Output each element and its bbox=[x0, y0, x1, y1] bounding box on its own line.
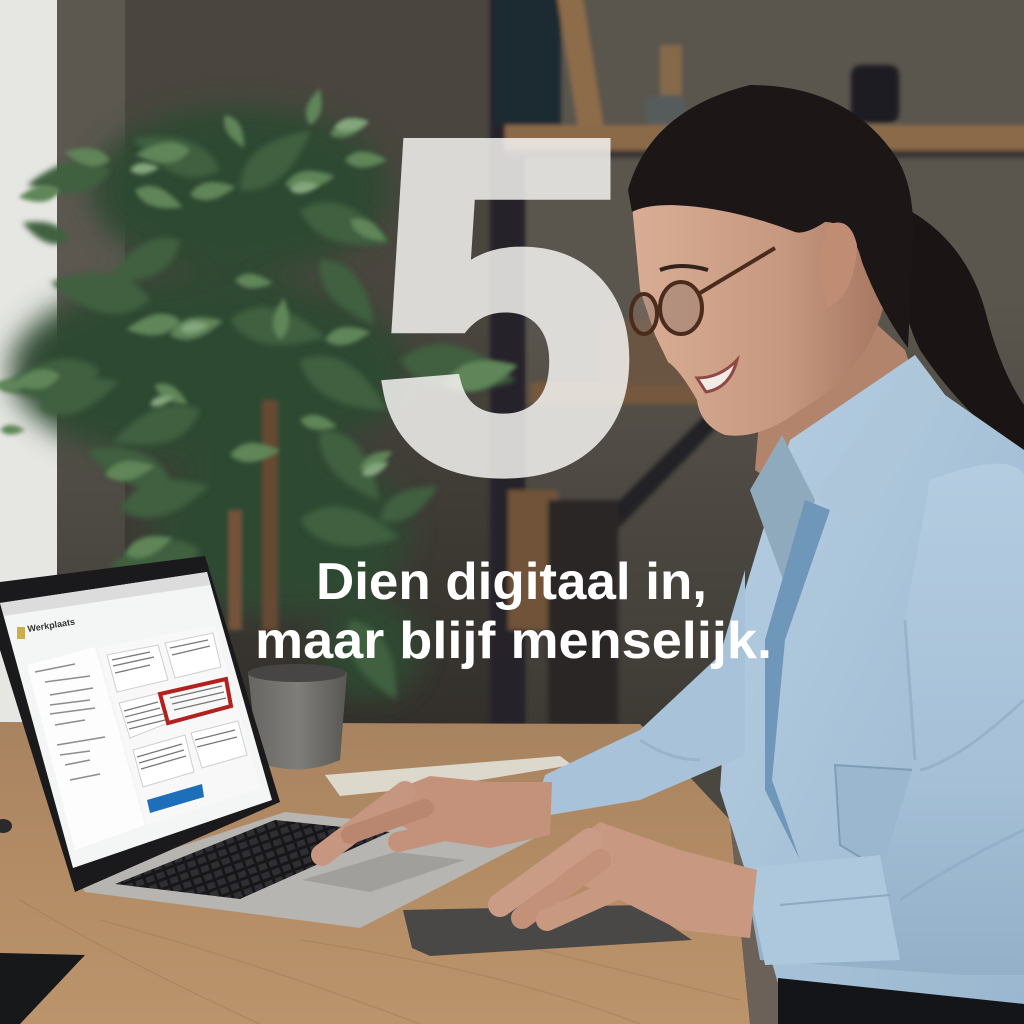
red highlight box bbox=[160, 679, 231, 723]
headline line 1: Dien digitaal in, bbox=[316, 553, 707, 611]
plant trunks bbox=[262, 400, 278, 630]
ponytail bbox=[900, 208, 1024, 460]
glasses bbox=[631, 248, 775, 334]
coffee mug bbox=[248, 664, 347, 770]
wood grain bbox=[20, 900, 740, 1024]
right hand on trackpad bbox=[500, 822, 757, 938]
hands bbox=[322, 776, 757, 938]
light leaves bbox=[129, 115, 391, 480]
eyebrow bbox=[660, 266, 708, 270]
bookshelf bbox=[490, 0, 1024, 725]
black tablet corner bbox=[0, 953, 85, 1024]
trackpad tablet bbox=[403, 905, 692, 956]
sidebar panel bbox=[27, 647, 145, 850]
big number 5: 5 bbox=[375, 44, 635, 567]
laptop bbox=[0, 556, 535, 928]
browser bar bbox=[0, 572, 210, 616]
hair bbox=[628, 85, 913, 348]
face bbox=[632, 196, 885, 436]
mid leaves bbox=[0, 87, 522, 563]
notebook on table bbox=[325, 756, 572, 796]
table bbox=[0, 722, 780, 1024]
neck bbox=[755, 300, 915, 510]
dark object at table edge bbox=[0, 819, 12, 833]
site logo: Werkplaats bbox=[27, 617, 76, 634]
submit button bbox=[147, 784, 204, 813]
cuff bbox=[745, 855, 900, 965]
shirt pocket bbox=[835, 765, 945, 875]
laptop base bbox=[78, 812, 535, 928]
form panel bbox=[98, 625, 260, 825]
inner collar shadow bbox=[750, 435, 815, 585]
card text lines bbox=[112, 640, 237, 769]
laptop lid bbox=[0, 556, 280, 892]
ear bbox=[820, 222, 857, 307]
sidebar lines bbox=[35, 664, 105, 780]
smile bbox=[697, 360, 737, 392]
shirt collar bbox=[815, 355, 945, 528]
site logo bbox=[17, 617, 76, 639]
shirt folds bbox=[640, 620, 1024, 900]
torso shirt bbox=[720, 355, 1024, 1004]
keyboard bbox=[115, 820, 390, 899]
arm sleeve left bbox=[535, 570, 745, 815]
dark leaves bbox=[0, 116, 520, 708]
arm sleeve right bbox=[745, 464, 1024, 975]
document cards bbox=[107, 633, 247, 787]
plant bbox=[0, 87, 522, 708]
screen bbox=[0, 572, 272, 868]
trackpad bbox=[302, 852, 465, 892]
plant foliage shadow bbox=[10, 105, 420, 700]
dark trousers bbox=[778, 978, 1024, 1024]
headline bbox=[255, 553, 772, 670]
placket bbox=[765, 500, 830, 860]
left hand on laptop bbox=[322, 776, 552, 855]
woman bbox=[535, 85, 1024, 1024]
headline line 2: maar blijf menselijk. bbox=[255, 612, 772, 670]
